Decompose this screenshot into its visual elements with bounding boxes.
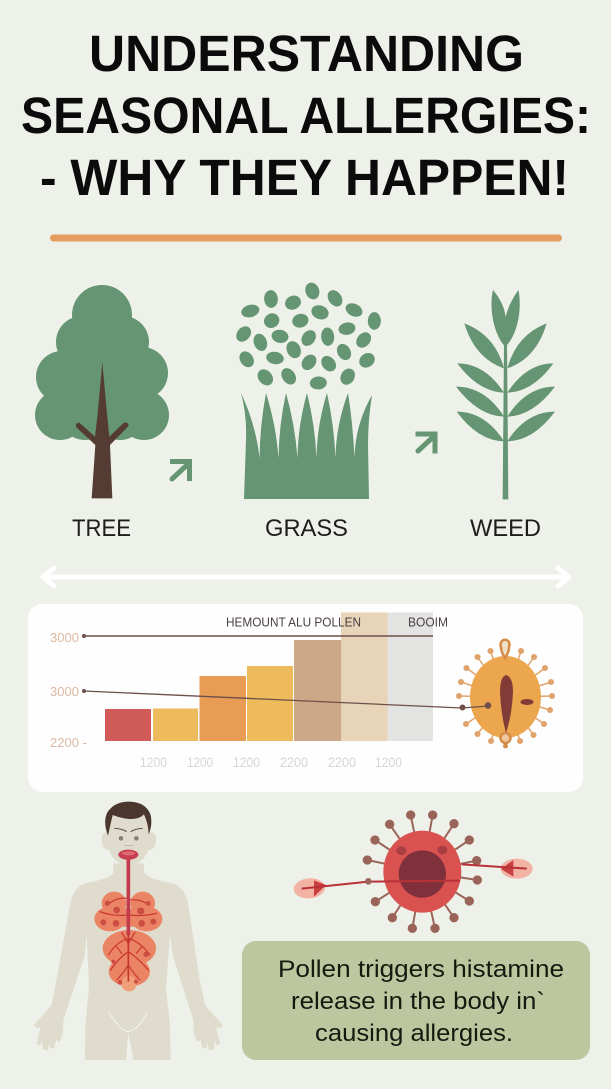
x-axis labels: 2200 [328,754,356,770]
face [114,828,143,846]
label: weed: WEED [470,515,541,542]
pollen seeds [234,281,380,390]
y-axis labels: 2200 - [50,735,87,750]
label: tree: TREE [72,515,131,542]
bar chart [105,612,433,741]
callout: histamine explanation [242,941,590,1060]
underwear line [109,1012,147,1032]
title: SEASONAL ALLERGIES: [21,87,591,144]
body silhouette [34,863,223,1060]
y-axis labels [50,630,87,750]
callout: histamine explanation: release in the body in` [291,988,545,1015]
chart annotation: BOOIM [408,614,448,630]
x-axis labels: 1200 [233,754,260,770]
arrow: grass to weed [416,434,435,454]
y-axis labels: 3000 [50,630,79,645]
chart heading: HEMOUNT ALU POLLEN [226,614,361,630]
title: UNDERSTANDING [89,25,524,82]
x-axis labels [140,754,402,770]
left pointer [293,877,460,900]
spikes [364,811,481,932]
label: grass: GRASS [265,515,348,542]
right pointer [462,859,533,879]
x-axis labels: 1200 [140,754,167,770]
callout: histamine explanation: Pollen triggers histamine [278,956,564,983]
trend lines [82,634,491,710]
grass blades [241,393,372,499]
x-axis labels: 1200 [375,754,402,770]
lower lobes [103,930,156,967]
illustration: human body with lungs [34,802,223,1060]
head [102,815,156,866]
illustration: histamine cell [293,811,533,932]
icon: tree [35,285,169,498]
title [21,25,591,206]
double-headed white arrow [43,568,569,586]
x-axis labels: 1200 [187,754,213,770]
orange divider [50,234,562,242]
icon: grass with pollen seeds [234,281,380,499]
panel: pollen chart [28,604,583,792]
icon: orange pollen grain [457,640,554,748]
icon: weed [456,290,555,499]
title: - WHY THEY HAPPEN! [40,149,569,206]
callout: histamine explanation: causing allergies. [315,1020,513,1047]
hair [105,802,151,836]
x-axis labels: 2200 [280,754,308,770]
y-axis labels: 3000 [50,684,79,699]
airway and veins [100,898,157,980]
arrow: tree to grass [170,462,190,481]
lungs [94,892,162,991]
